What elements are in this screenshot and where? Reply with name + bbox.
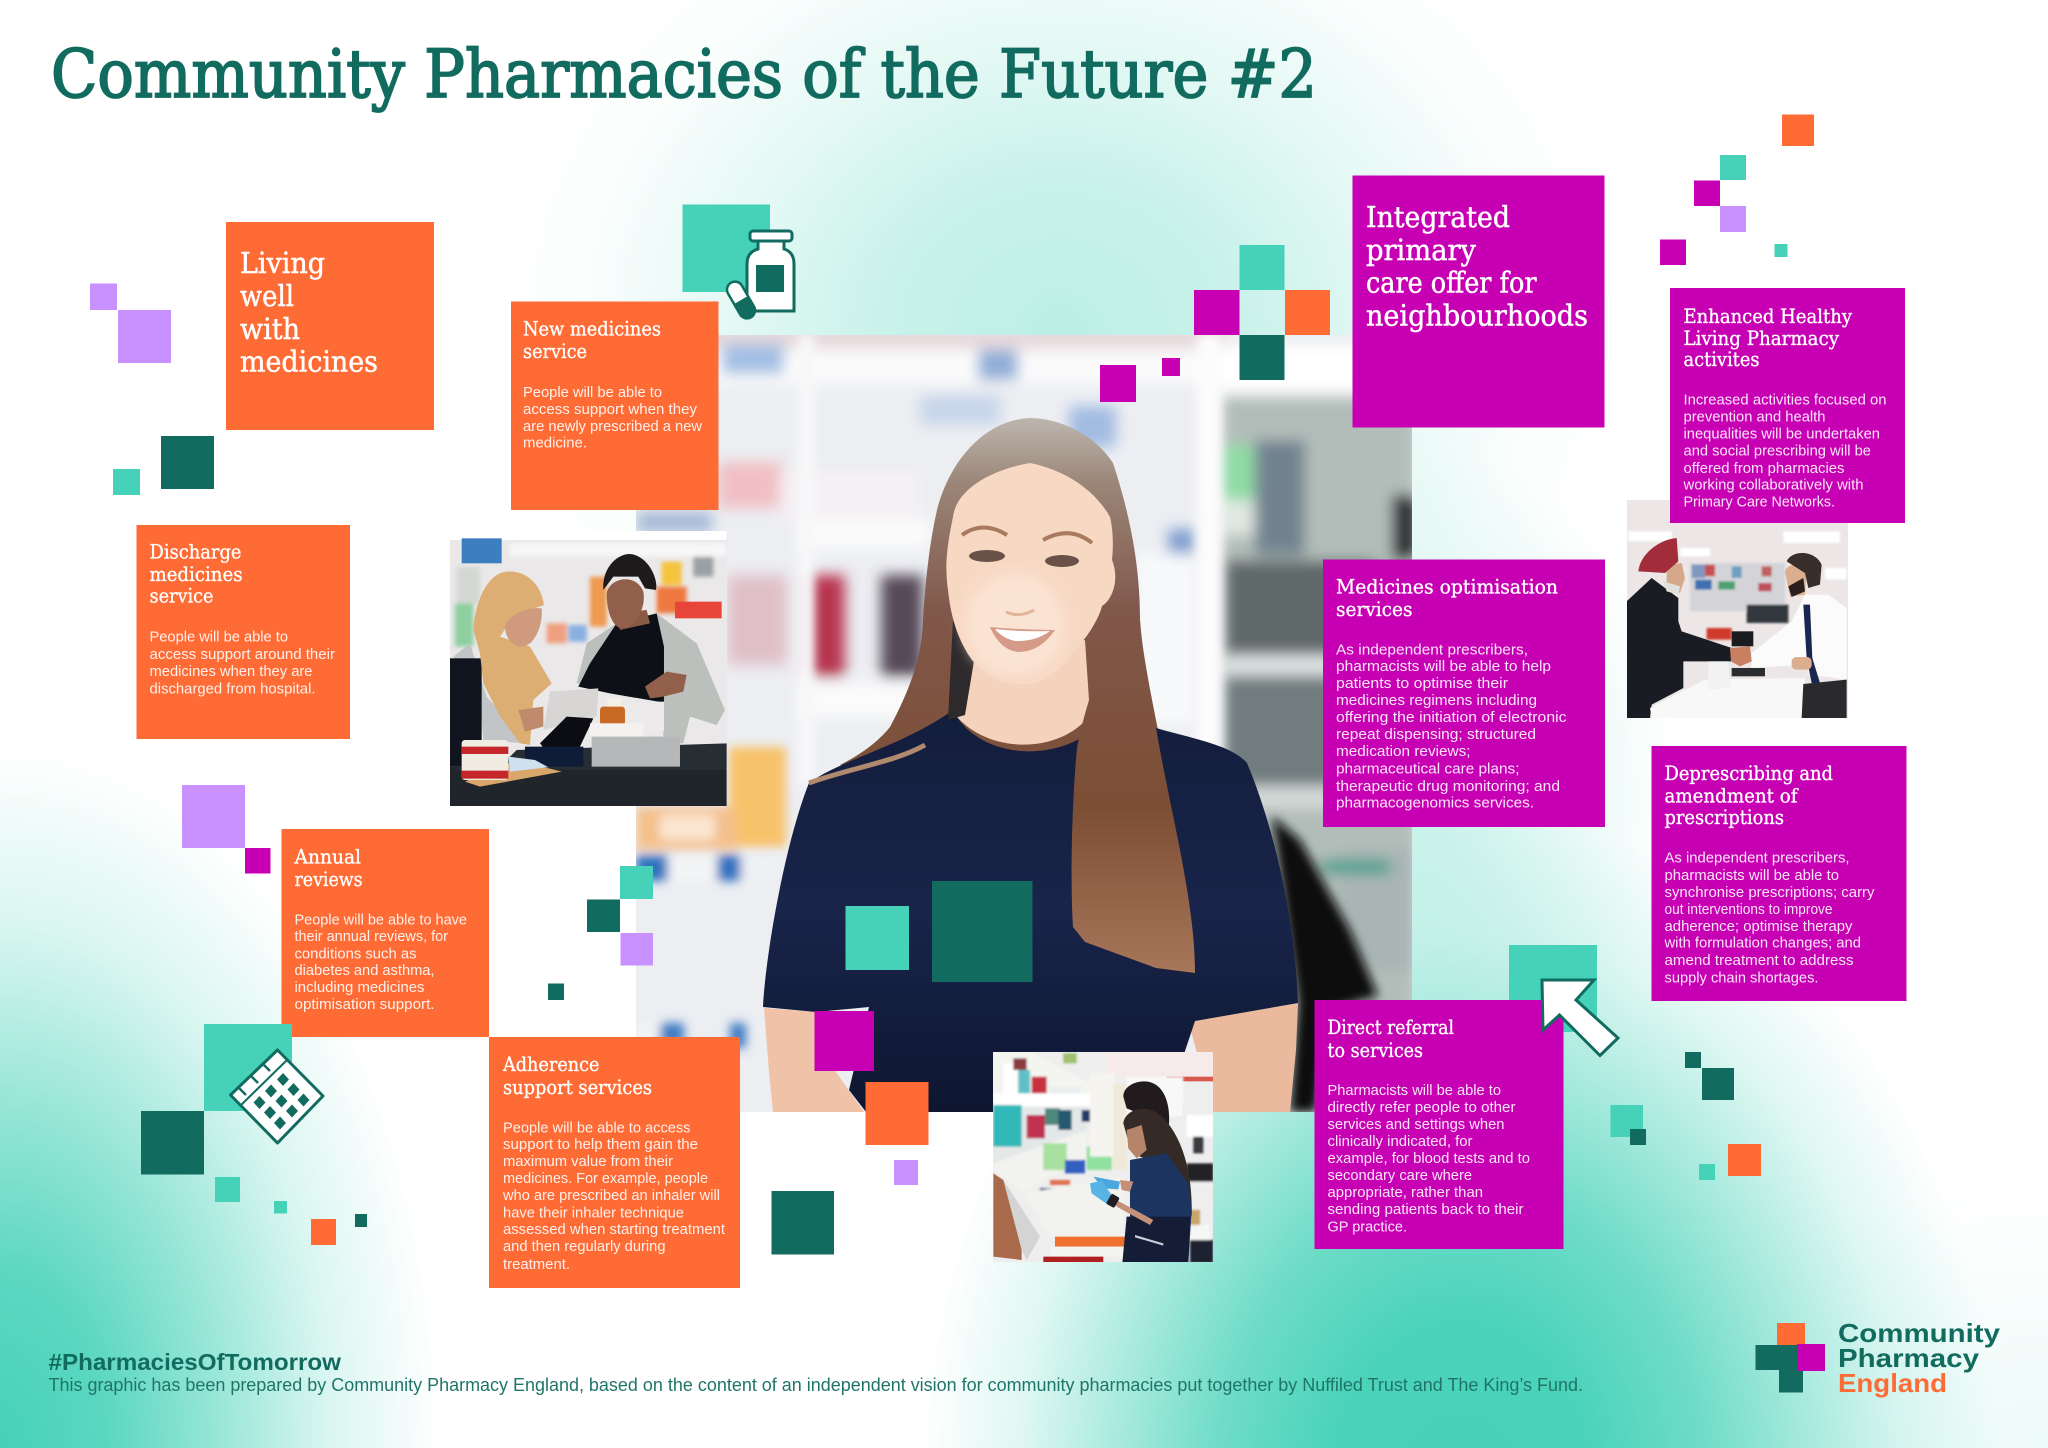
heading: discharge medicines service: Discharge bbox=[150, 540, 242, 564]
body text: medicines optimisation services: therapeutic drug monitoring; and bbox=[1336, 778, 1560, 795]
heading: direct referral to services bbox=[1328, 1015, 1454, 1062]
body text: direct referral to services: sending patients back to their bbox=[1328, 1201, 1524, 1218]
heading: deprescribing and amendment: prescriptions bbox=[1664, 805, 1784, 829]
dark hair shadow under cheek bbox=[948, 620, 975, 720]
heading: living well with medicines bbox=[240, 246, 378, 378]
heading: new medicines service bbox=[523, 316, 661, 363]
heading: discharge medicines service: medicines bbox=[150, 562, 242, 586]
heading: annual reviews: reviews bbox=[294, 867, 362, 891]
decorative cross of squares: top centre bbox=[1100, 245, 1330, 402]
heading: living well with medicines: well bbox=[240, 279, 294, 313]
icon: teal square behind arrow bbox=[1509, 945, 1597, 1032]
decorative squares: left middle group bbox=[182, 785, 270, 874]
heading: direct referral to services: Direct referral bbox=[1328, 1015, 1454, 1039]
body text: medicines optimisation services: pharmacogenomics services. bbox=[1336, 794, 1534, 812]
body text: discharge medicines service: access support around their bbox=[150, 646, 335, 663]
body text: deprescribing and amendment: synchronise prescriptions; carry bbox=[1664, 884, 1875, 901]
photo: two women at a pharmacy counter bbox=[450, 530, 730, 810]
body text: discharge medicines service: medicines when they are bbox=[150, 663, 312, 680]
decorative squares: top right group bbox=[1660, 114, 1814, 265]
body text: medicines optimisation services: repeat dispensing; structured bbox=[1336, 726, 1536, 743]
body text: adherence support services: treatment. bbox=[503, 1256, 570, 1273]
arms bbox=[764, 1008, 864, 1112]
heading: adherence support services bbox=[502, 1052, 652, 1099]
photo: pharmacist shaking hands with customer bbox=[1625, 498, 1850, 723]
heading: living well with medicines: Living bbox=[240, 246, 325, 280]
photo: pharmacist working at the shelves bbox=[990, 1050, 1215, 1275]
panel: discharge medicines service bbox=[136, 525, 350, 739]
decorative squares: bottom left group bbox=[141, 1111, 367, 1245]
logo: Community Pharmacy England bbox=[1756, 1318, 2001, 1398]
body text: deprescribing and amendment: adherence; optimise therapy bbox=[1664, 918, 1853, 935]
body text: deprescribing and amendment: amend treatment to address bbox=[1664, 952, 1854, 969]
body text: medicines optimisation services: patients to optimise their bbox=[1336, 675, 1508, 692]
hair front strands bbox=[1072, 603, 1195, 973]
body text: enhanced healthy living: and social prescribing will be bbox=[1684, 442, 1871, 460]
heading: enhanced healthy living bbox=[1684, 304, 1853, 371]
heading: adherence support services: support services bbox=[503, 1075, 652, 1099]
body text: direct referral to services: services and settings when bbox=[1328, 1116, 1504, 1133]
cardigan bbox=[577, 613, 725, 743]
heading: annual reviews bbox=[294, 844, 362, 891]
heading: deprescribing and amendment: Deprescribing and bbox=[1664, 761, 1833, 785]
body text: annual reviews: optimisation support. bbox=[294, 996, 434, 1013]
title: Community Pharmacies of the Future #2 bbox=[51, 36, 1317, 113]
body text: medicines optimisation services: medication reviews; bbox=[1336, 743, 1470, 760]
icon: calendar bbox=[204, 1024, 323, 1143]
body text: deprescribing and amendment bbox=[1664, 850, 1875, 986]
body text: direct referral to services: GP practice. bbox=[1328, 1218, 1407, 1236]
heading: discharge medicines service: service bbox=[150, 584, 214, 608]
body text: deprescribing and amendment: out interventions to improve bbox=[1664, 901, 1832, 918]
body text: adherence support services: have their inhaler technique bbox=[503, 1204, 684, 1222]
body text: adherence support services: and then regularly during bbox=[503, 1238, 666, 1255]
panel: deprescribing and amendment of prescriptions bbox=[1652, 746, 1906, 1001]
body text: enhanced healthy living: prevention and health bbox=[1684, 408, 1826, 426]
heading: integrated primary care offer: primary bbox=[1366, 233, 1477, 267]
heading: living well with medicines: with bbox=[240, 312, 300, 346]
panel: new medicines service bbox=[511, 302, 718, 510]
panel: direct referral to services bbox=[1314, 1000, 1564, 1249]
photo: smiling pharmacist in front of shelves bbox=[636, 325, 1419, 1115]
body text: annual reviews: their annual reviews, for bbox=[294, 928, 448, 945]
body text: annual reviews: conditions such as bbox=[294, 946, 416, 962]
basket and boxes bbox=[543, 688, 598, 730]
body text: direct referral to services: directly refer people to other bbox=[1328, 1099, 1516, 1116]
logo: Community Pharmacy England: England bbox=[1838, 1368, 1947, 1398]
body text: medicines optimisation services: As independent prescribers, bbox=[1336, 642, 1528, 658]
body text: deprescribing and amendment: As independent prescribers, bbox=[1664, 850, 1850, 866]
heading: integrated primary care offer: Integrated bbox=[1366, 200, 1510, 234]
body text: adherence support services bbox=[502, 1120, 726, 1273]
neck bbox=[953, 640, 1090, 745]
heading: new medicines service: New medicines bbox=[523, 316, 661, 340]
body text: enhanced healthy living: working collaboratively with bbox=[1683, 476, 1864, 494]
hair strand over left shoulder bbox=[809, 745, 925, 783]
body text: discharge medicines service: People will be able to bbox=[150, 628, 288, 646]
heading: enhanced healthy living: Enhanced Healthy bbox=[1684, 304, 1853, 328]
body text: enhanced healthy living bbox=[1683, 392, 1886, 510]
icon: arrow pointing up-left bbox=[1542, 980, 1618, 1056]
body text: discharge medicines service bbox=[150, 628, 335, 698]
body text: direct referral to services: secondary care where bbox=[1328, 1167, 1472, 1184]
body text: enhanced healthy living: offered from pharmacies bbox=[1684, 460, 1844, 477]
heading: medicines optimisation services: services bbox=[1336, 597, 1412, 621]
body text: medicines optimisation services: medicines regimens including bbox=[1336, 692, 1537, 709]
logo: Community Pharmacy England: Community bbox=[1838, 1318, 2001, 1348]
decorative squares: bottom right group bbox=[1610, 1052, 1761, 1180]
heading: new medicines service: service bbox=[523, 339, 587, 363]
body text: enhanced healthy living: inequalities will be undertaken bbox=[1684, 426, 1880, 442]
heading: deprescribing and amendment: amendment of bbox=[1664, 784, 1799, 808]
heading: enhanced healthy living: activites bbox=[1684, 347, 1760, 371]
body text: medicines optimisation services: pharmacists will be able to help bbox=[1336, 658, 1551, 675]
body text: adherence support services: support to help them gain the bbox=[503, 1136, 698, 1153]
body text: enhanced healthy living: Primary Care Networks. bbox=[1684, 494, 1835, 510]
body text: new medicines service: People will be able to bbox=[523, 384, 662, 401]
panel: annual reviews bbox=[282, 829, 489, 1037]
facial features bbox=[962, 528, 1092, 652]
body text: deprescribing and amendment: pharmacists will be able to bbox=[1664, 867, 1839, 884]
heading: deprescribing and amendment bbox=[1664, 761, 1833, 829]
body text: medicines optimisation services: pharmaceutical care plans; bbox=[1336, 760, 1520, 778]
hair behind bbox=[840, 418, 1160, 770]
body text: medicines optimisation services: offering the initiation of electronic bbox=[1336, 709, 1567, 726]
heading: adherence support services: Adherence bbox=[502, 1052, 600, 1076]
body text: deprescribing and amendment: with formulation changes; and bbox=[1664, 934, 1861, 952]
body text: adherence support services: maximum value from their bbox=[503, 1153, 673, 1170]
heading: living well with medicines: medicines bbox=[240, 344, 378, 378]
panel: living well with medicines bbox=[226, 222, 434, 430]
heading: integrated primary care offer: neighbourhoods bbox=[1366, 298, 1588, 332]
body text: annual reviews: including medicines bbox=[294, 979, 424, 996]
heading: direct referral to services: to services bbox=[1328, 1038, 1423, 1062]
body text: adherence support services: People will be able to access bbox=[503, 1120, 690, 1136]
decorative squares: over main photo bbox=[772, 881, 1032, 1254]
body text: annual reviews: diabetes and asthma, bbox=[294, 962, 434, 979]
body text: new medicines service: are newly prescribed a new bbox=[523, 418, 702, 435]
panel: adherence support services bbox=[489, 1037, 740, 1288]
face bbox=[946, 463, 1115, 684]
body text: direct referral to services: Pharmacists will be able to bbox=[1328, 1082, 1501, 1099]
body text: annual reviews: People will be able to have bbox=[294, 912, 467, 928]
body text: direct referral to services bbox=[1328, 1082, 1530, 1236]
heading: annual reviews: Annual bbox=[294, 844, 361, 868]
heading: integrated primary care offer bbox=[1366, 200, 1588, 332]
body text: adherence support services: who are prescribed an inhaler will bbox=[502, 1187, 720, 1204]
heading: discharge medicines service bbox=[150, 540, 242, 608]
body text: direct referral to services: appropriate, rather than bbox=[1328, 1184, 1483, 1201]
body text: direct referral to services: example, for blood tests and to bbox=[1328, 1150, 1530, 1167]
logo: Community Pharmacy England: Pharmacy bbox=[1838, 1343, 1980, 1373]
panel: integrated primary care offer for neighbourhoods bbox=[1352, 176, 1604, 428]
body text: annual reviews bbox=[294, 912, 467, 1013]
body text: enhanced healthy living: Increased activities focused on bbox=[1684, 392, 1886, 408]
dress bbox=[763, 710, 1298, 1112]
body text: deprescribing and amendment: supply chain shortages. bbox=[1664, 970, 1818, 986]
panel: medicines optimisation services bbox=[1323, 560, 1605, 827]
body text: new medicines service bbox=[523, 384, 702, 452]
footer note: This graphic has been prepared by Community Pharmacy England, based on the content of an independent vision for community pharmacies put together by Nuffiled Trust and The King’s Fund. bbox=[48, 1375, 1583, 1395]
hashtag: #PharmaciesOfTomorrow bbox=[48, 1349, 341, 1375]
icon: medicine bottle and pill bbox=[682, 204, 794, 321]
heading: enhanced healthy living: Living Pharmacy bbox=[1684, 326, 1840, 350]
panel: enhanced healthy living pharmacy activites bbox=[1670, 288, 1905, 523]
heading: integrated primary care offer: care offer for bbox=[1366, 266, 1537, 300]
decorative squares: top left group bbox=[90, 284, 214, 495]
body text: medicines optimisation services bbox=[1336, 642, 1567, 812]
body text: discharge medicines service: discharged from hospital. bbox=[150, 680, 316, 698]
decorative squares: centre left group bbox=[548, 866, 653, 1000]
body text: adherence support services: medicines. For example, people bbox=[503, 1170, 708, 1187]
heading: medicines optimisation services bbox=[1336, 574, 1558, 621]
body text: new medicines service: access support when they bbox=[523, 401, 697, 418]
heading: medicines optimisation services: Medicines optimisation bbox=[1336, 574, 1558, 598]
body text: adherence support services: assessed when starting treatment bbox=[503, 1221, 726, 1238]
body text: direct referral to services: clinically indicated, for bbox=[1328, 1133, 1472, 1150]
body text: new medicines service: medicine. bbox=[523, 434, 587, 452]
